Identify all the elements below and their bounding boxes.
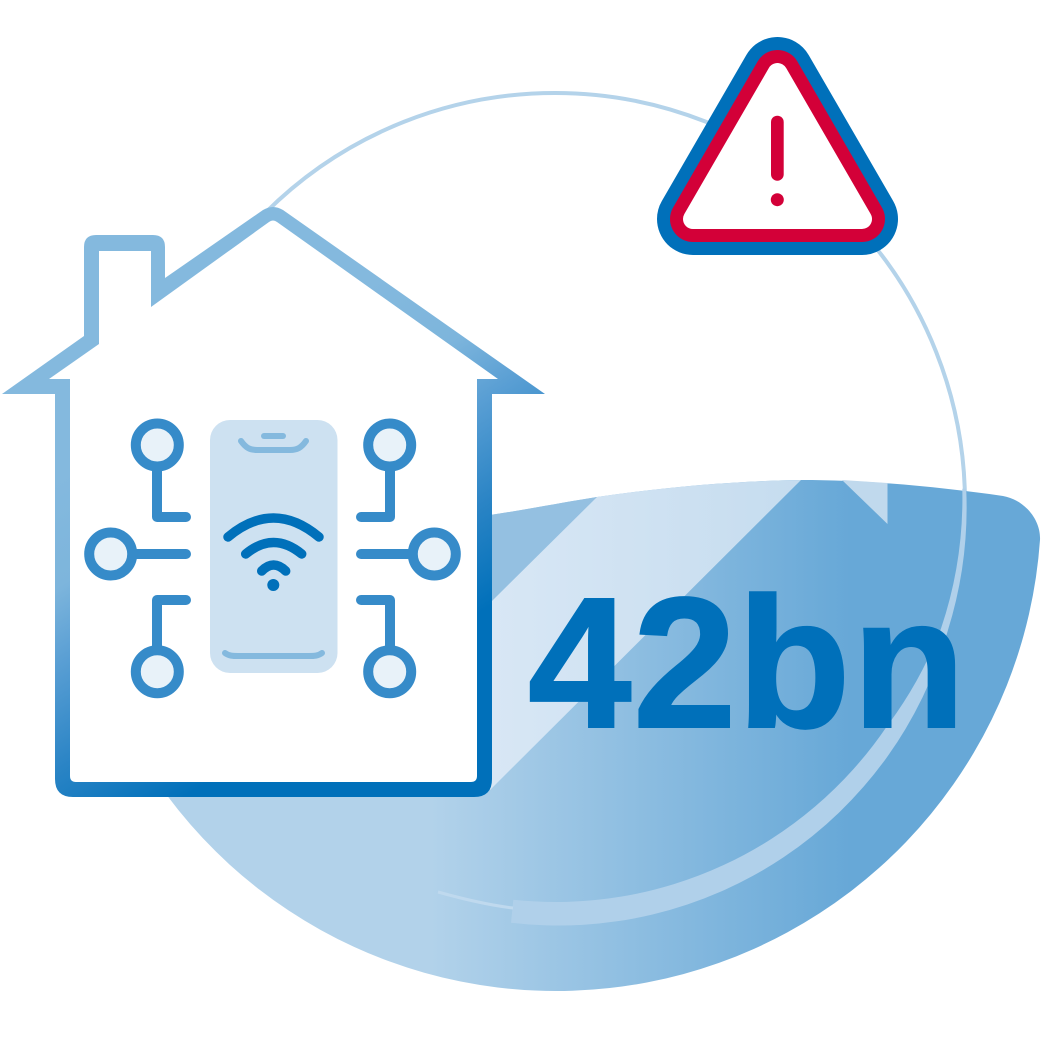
exclamation mark [771,116,784,206]
thin arc continuation [438,892,513,908]
headline number: 42bn [528,560,966,767]
phone bottom bar [225,653,322,656]
blue water shape [156,480,1040,991]
circuit nodes left [89,424,186,693]
phone [210,420,338,673]
circuit nodes right [361,424,456,693]
wifi icon [228,518,319,591]
phone speaker slot [264,433,283,439]
warning triangle [693,73,862,219]
thin circle outline [145,93,965,913]
phone top notch [241,441,306,450]
thick light arc [511,489,967,926]
glass reflection [490,480,888,790]
house [2,207,545,797]
